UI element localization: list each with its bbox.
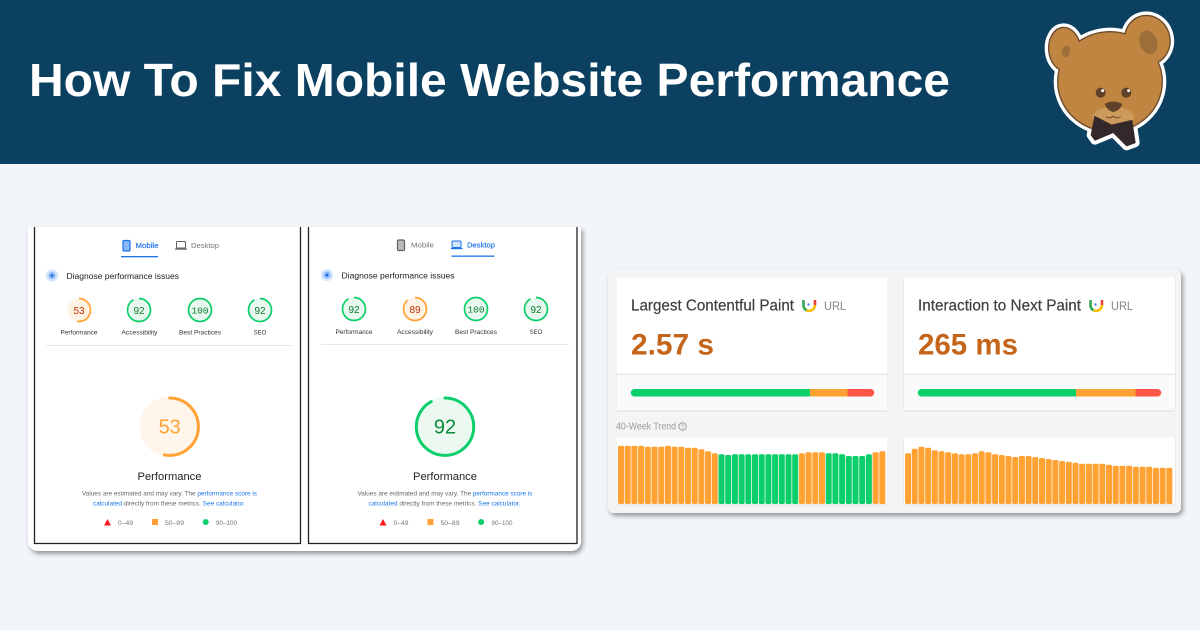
- note and legend left: 50–89: [165, 521, 185, 527]
- gauges right: Best Practices: [455, 330, 497, 336]
- note and legend right: 90–100: [492, 521, 513, 527]
- gauges left: 92: [133, 306, 145, 317]
- note and legend right: [358, 492, 532, 527]
- gauges left: Best Practices: [179, 330, 221, 336]
- gauges right: SEO: [530, 330, 543, 336]
- note and legend right: 0–49: [394, 521, 409, 527]
- gauges left: SEO: [254, 330, 267, 336]
- icon: CrUX logo: [1090, 300, 1102, 311]
- bar chart: INP trend: [904, 438, 1175, 504]
- note and legend left: Values are estimated and may vary. The performance score is: [82, 492, 257, 498]
- big gauge left: [138, 397, 202, 483]
- gauges right: 92: [348, 305, 360, 316]
- gauges right: 100: [467, 304, 485, 316]
- card: Largest Contentful Paint: URL: [824, 299, 846, 313]
- desktop tab: Desktop: [467, 240, 495, 250]
- card: Interaction to Next Paint: URL: [1111, 299, 1133, 313]
- icon: CrUX logo: [804, 300, 815, 311]
- panel: Core Web Vitals: [608, 269, 1181, 513]
- gauges right: [336, 298, 548, 336]
- card: Largest Contentful Paint: [616, 278, 888, 410]
- note and legend left: [82, 492, 257, 527]
- gauges left: [60, 298, 272, 336]
- note and legend left: calculated directly from these metrics. See calculator.: [93, 502, 245, 508]
- card: Interaction to Next Paint: 265 ms: [918, 328, 1018, 362]
- big gauge left: Performance: [138, 471, 202, 483]
- mobile tab: Mobile: [136, 241, 158, 250]
- heading: 40-week trend: 40-Week Trend: [616, 422, 676, 432]
- gauges right: 89: [409, 305, 421, 316]
- mobile tab: [121, 240, 219, 257]
- heading: diagnose right: Diagnose performance issues: [342, 270, 454, 280]
- header banner: [0, 0, 1200, 164]
- note and legend left: 90–100: [216, 521, 238, 527]
- gauges right: 92: [530, 305, 542, 316]
- big gauge right: Performance: [413, 471, 477, 483]
- panel: PageSpeed screenshots: [28, 227, 581, 551]
- distribution bar: [631, 389, 874, 396]
- card: Largest Contentful Paint: 2.57 s: [631, 328, 714, 362]
- big gauge left: 53: [159, 416, 181, 438]
- title: How To Fix Mobile Website Performance: [29, 54, 950, 106]
- heading: 40-week trend: ?: [681, 425, 685, 431]
- desktop tab: [398, 240, 495, 257]
- card: Largest Contentful Paint: Largest Contentful Paint: [631, 298, 795, 314]
- note and legend right: calculated directly from these metrics. See calculator.: [368, 502, 521, 508]
- icon: bear mascot: [1048, 11, 1175, 146]
- note and legend right: Values are estimated and may vary. The performance score is: [358, 492, 532, 498]
- note and legend right: 50–89: [440, 521, 460, 527]
- note and legend left: 0–49: [118, 521, 134, 527]
- desktop tab: Mobile: [411, 240, 434, 250]
- gauges right: Performance: [336, 330, 373, 336]
- gauges right: Accessibility: [397, 330, 433, 336]
- card: Interaction to Next Paint: Interaction to Next Paint: [918, 298, 1082, 314]
- gauges left: 92: [254, 306, 266, 317]
- mobile tab: Desktop: [191, 241, 219, 250]
- card: Interaction to Next Paint: [904, 278, 1175, 410]
- gauges left: 53: [73, 306, 85, 317]
- distribution bar: [918, 389, 1161, 396]
- gauges left: 100: [191, 306, 209, 316]
- big gauge right: [413, 397, 477, 483]
- gauges left: Accessibility: [122, 330, 158, 336]
- big gauge right: 92: [434, 416, 456, 438]
- heading: diagnose left: Diagnose performance issues: [66, 271, 179, 281]
- gauges left: Performance: [60, 330, 98, 336]
- bar chart: LCP trend: [616, 438, 888, 504]
